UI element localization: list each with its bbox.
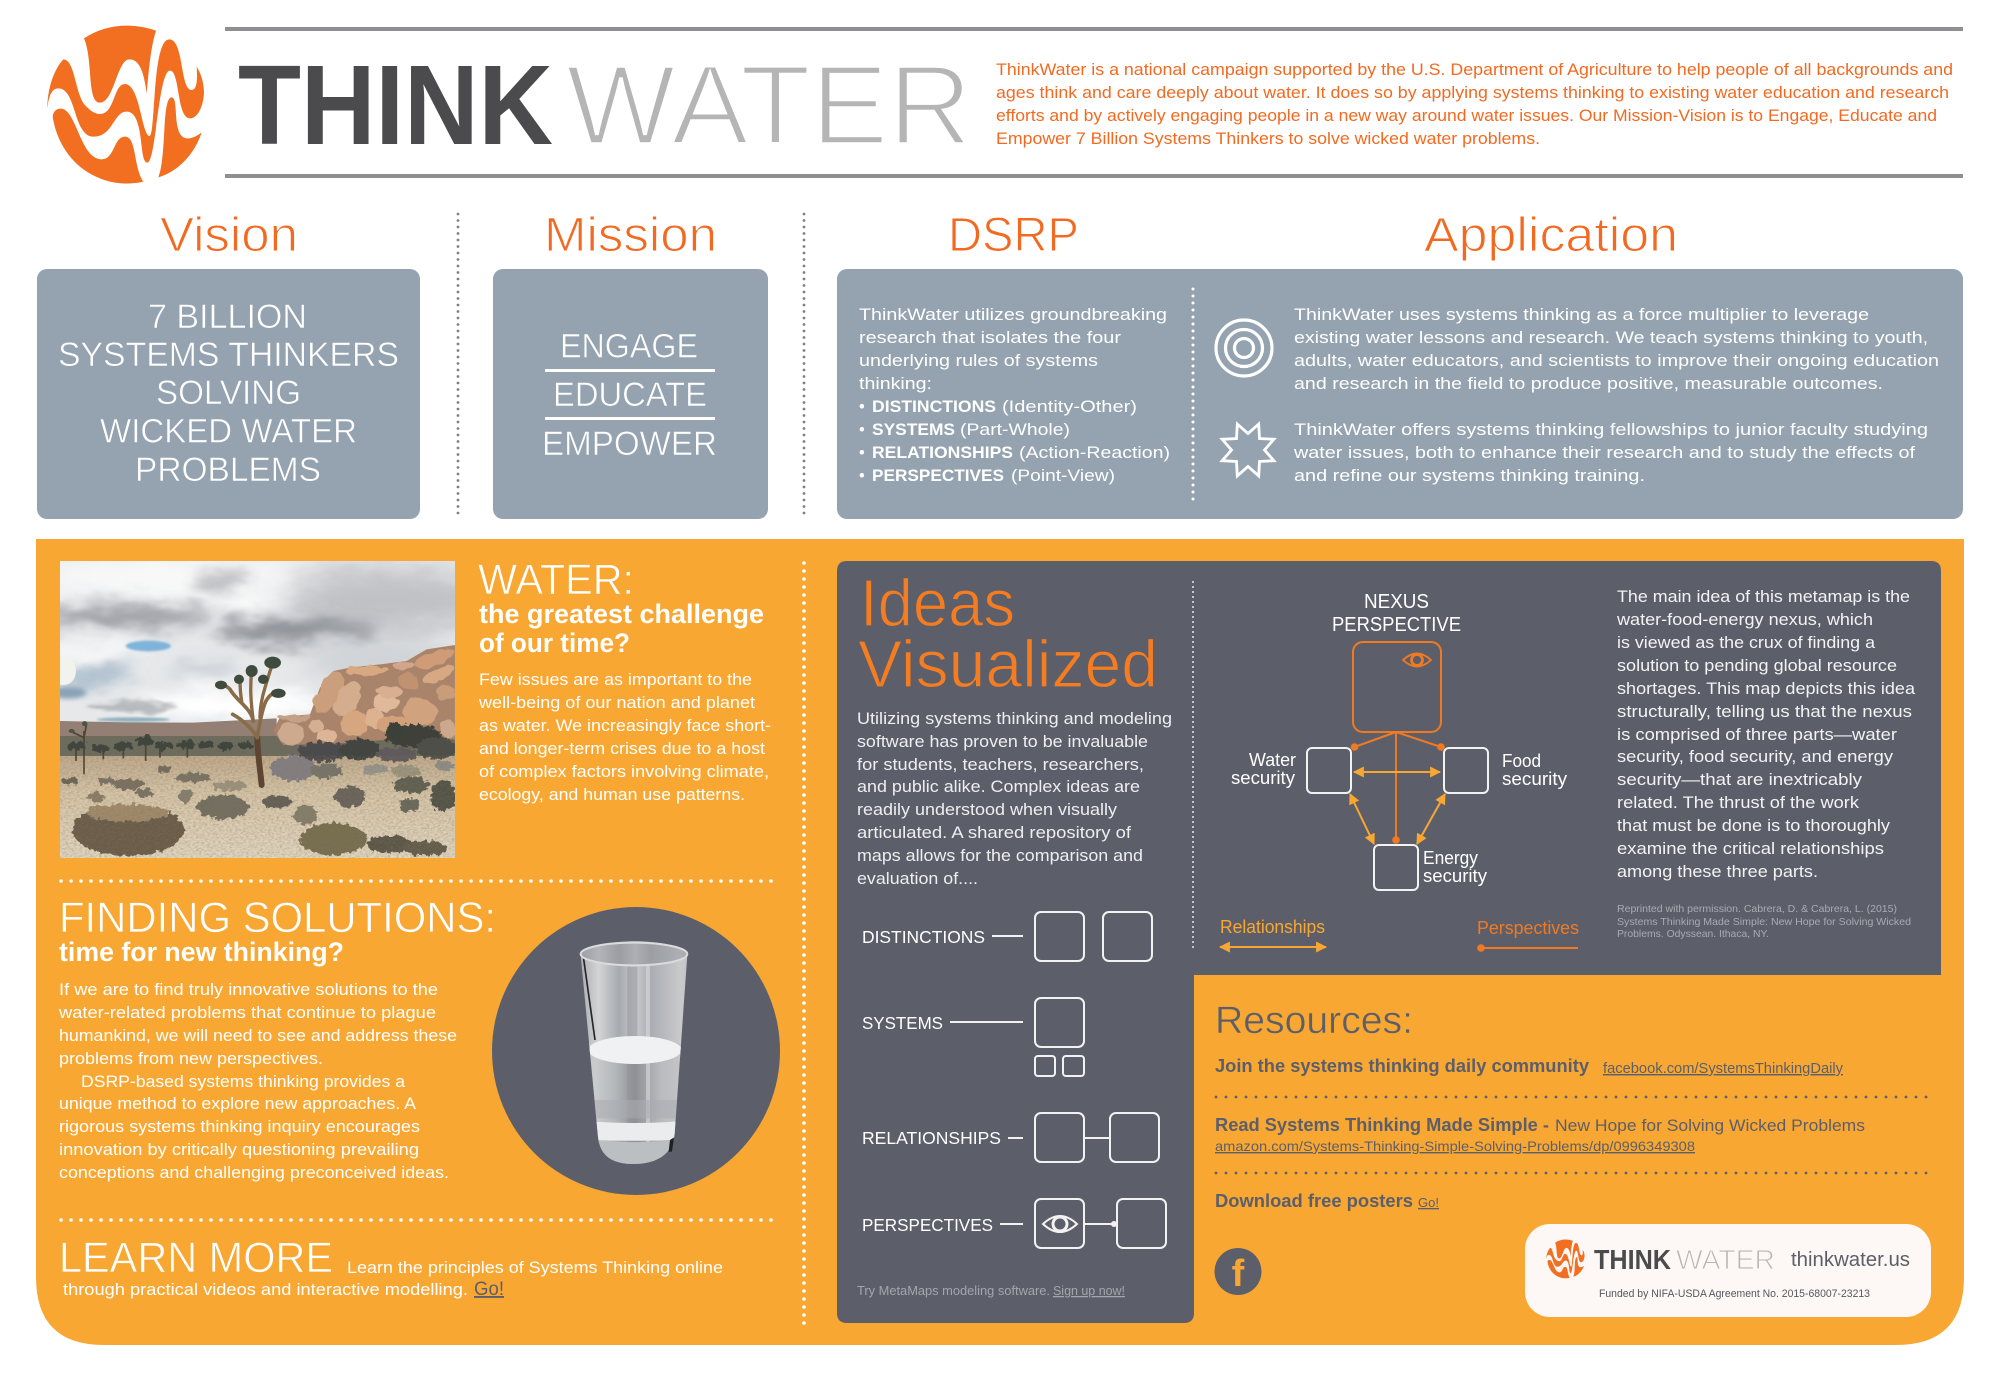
footer logo card: Funded by NIFA-USDA Agreement No. 2015-68007-23213 [1599,1288,1870,1300]
legend: relationships: Relationships [1220,916,1325,937]
part labels: security [1502,769,1567,789]
application text 1: and research in the field to produce positive, measurable outcomes. [1294,375,1883,393]
part boxes [1307,748,1488,890]
application text 1 [1294,306,1939,393]
text block: water: of complex factors involving climate, [479,763,769,781]
nexus diagram [1231,591,1567,890]
footer logo card: THINK [1594,1244,1671,1275]
icon: facebook [1214,1248,1262,1295]
joshua tree [225,668,273,788]
treeline [67,736,253,752]
citation: Problems. Odyssean. Ithaca, NY. [1617,928,1769,940]
relationship arrows [1350,772,1445,844]
icon: facebook: f [1232,1253,1245,1295]
resource: community [1215,1056,1844,1077]
DSRP text: underlying rules of systems [859,352,1098,370]
text block: metamap: is viewed as the crux of finding a [1617,634,1876,652]
diagram: perspectives [862,1199,1166,1248]
heading: ideas visualized [858,566,1158,702]
diagram: systems [862,998,1084,1076]
heading: finding solutions: FINDING SOLUTIONS: [59,894,496,942]
footer logo card: thinkwater.us [1791,1249,1910,1271]
title: THINK WATER [238,42,972,168]
application text 2: ThinkWater offers systems thinking fellowships to junior faculty studying [1294,421,1928,439]
text block: metamap: shortages. This map depicts this idea [1617,680,1916,698]
resource: book [1215,1115,1865,1154]
intro paragraph: ages think and care deeply about water. It does so by applying systems thinking to existing water education and research [996,84,1949,102]
citation: Systems Thinking Made Simple: New Hope for Solving Wicked [1617,916,1911,928]
panel: vision: PROBLEMS [135,451,321,489]
application text 1: ThinkWater uses systems thinking as a force multiplier to leverage [1294,306,1869,324]
application text 1: existing water lessons and research. We teach systems thinking to youth, [1294,329,1928,347]
DSRP text: PERSPECTIVES [872,467,1004,485]
icon: eye [1043,1216,1077,1232]
header rules [225,27,1963,178]
text block: metamap: security—that are inextricably [1617,771,1863,789]
heading: WATER: WATER: [478,556,634,604]
text block: water: and longer-term crises due to a host [479,740,765,758]
resources heading: Resources: [1215,1000,1413,1042]
diagram: perspectives: PERSPECTIVES [862,1215,993,1235]
DSRP text: (Identity-Other) [1002,398,1137,416]
text block: ideas: and public alike. Complex ideas are [857,778,1140,796]
panel: vision: 7 BILLION [148,298,307,336]
text block: metamap: water-food-energy nexus, which [1616,611,1873,629]
panel: vision: SYSTEMS THINKERS [58,336,399,374]
DSRP text: (Part-Whole) [960,421,1070,439]
diagram: relationships [862,1113,1159,1162]
text block: metamap: is comprised of three parts—water [1617,726,1898,744]
part labels: security [1423,866,1487,886]
text block: water: as water. We increasingly face short- [479,717,771,735]
resource: book: amazon.com/Systems-Thinking-Simple-Solving-Problems/dp/0996349308 [1215,1138,1695,1154]
heading: WATER [478,556,764,658]
logo: orange water circle [47,26,204,184]
text block: water: well-being of our nation and planet [478,694,755,712]
panel: vision: WICKED WATER [100,412,357,450]
DSRP text: DISTINCTIONS [872,398,996,416]
DSRP text: • [859,398,865,416]
metamaps note: Sign up now! [1053,1284,1125,1298]
text block: ideas: readily understood when visually [857,801,1118,819]
application text 2 [1293,421,1928,485]
learn more: LEARN MORE [59,1234,333,1282]
heading: finding solutions [59,894,496,967]
text block: finding solutions: If we are to find truly innovative solutions to the [59,981,438,999]
application text 2: water issues, both to enhance their research and to study the effects of [1293,444,1915,462]
heading: ideas visualized: Visualized [858,627,1158,702]
section headings: Mission [544,209,717,262]
inner dotted divider [1192,582,1194,952]
text block: finding solutions: problems from new perspectives. [59,1050,323,1068]
learn more: through practical videos and interactive modelling. [63,1281,468,1299]
citation [1617,903,1911,940]
part labels [1231,750,1567,886]
legend: perspectives: Perspectives [1477,917,1579,938]
text block: metamap: that must be done is to thoroughly [1617,817,1891,835]
glass in circle [492,907,780,1195]
icon: target [1216,320,1272,376]
text block: finding solutions: innovation by critically questioning prevailing [59,1141,419,1159]
white dotted dividers [61,563,804,1326]
section headings: DSRP [948,209,1079,262]
icon: star [1222,424,1274,476]
text block: ideas: maps allows for the comparison and [857,847,1143,865]
section headings: Vision [160,209,298,262]
DSRP text: • [859,467,865,485]
nexus title: PERSPECTIVE [1332,614,1461,636]
text block: water: Few issues are as important to the [479,671,752,689]
intro paragraph: Empower 7 Billion Systems Thinkers to solve wicked water problems. [996,130,1540,148]
text block: ideas: evaluation of.... [857,870,978,888]
intro paragraph [996,61,1953,148]
text block: metamap: examine the critical relationships [1617,840,1884,858]
shrubs [61,722,457,856]
resource: book: Read Systems Thinking Made Simple - [1215,1115,1549,1135]
diagram: relationships: RELATIONSHIPS [862,1128,1001,1148]
heading: ideas visualized: Ideas [860,566,1015,641]
text block: metamap [1616,588,1916,881]
DSRP text: SYSTEMS [872,421,955,439]
intro paragraph: efforts and by actively engaging people in a new way around water issues. Our Mission-Vision is to Engage, Educate and [996,107,1937,125]
text block: ideas: software has proven to be invaluable [857,733,1148,751]
part labels: Water [1249,750,1296,770]
legend: relationships [1220,916,1326,947]
section headings [160,209,1678,262]
text block: finding solutions: humankind, we will need to see and address these [59,1027,457,1045]
heading: WATER: the greatest challenge [479,599,764,629]
text block: finding solutions: rigorous systems thinking inquiry encourages [59,1118,420,1136]
text block: metamap: related. The thrust of the work [1617,794,1860,812]
footer logo card: WATER [1676,1244,1775,1275]
text block: finding solutions: conceptions and challenging preconceived ideas. [59,1164,449,1182]
panel: mission: ENGAGE [560,328,698,366]
application text 1: adults, water educators, and scientists to improve their ongoing education [1294,352,1939,370]
title: THINK WATER: THINK [238,42,553,168]
text block: finding solutions: DSRP-based systems thinking provides a [81,1073,406,1091]
DSRP text: • [859,444,865,462]
heading: WATER: of our time? [479,628,630,658]
panel: vision [37,269,420,519]
DSRP text [859,306,1170,485]
diagram: systems: SYSTEMS [862,1013,943,1033]
DSRP text: thinking: [859,375,932,393]
text block: ideas: for students, teachers, researchers, [857,756,1144,774]
text block: water: ecology, and human use patterns. [479,786,745,804]
text block: metamap: The main idea of this metamap is the [1617,588,1910,606]
text block: finding solutions: water-related problems that continue to plague [58,1004,436,1022]
text block: metamap: solution to pending global resource [1617,657,1897,675]
text block: ideas: articulated. A shared repository of [857,824,1131,842]
DSRP text: research that isolates the four [859,329,1122,347]
perspective links [1351,732,1445,844]
citation: Reprinted with permission. Cabrera, D. & Cabrera, L. (2015) [1617,903,1897,915]
panel: DSRP and application [837,269,1963,519]
resource: book: New Hope for Solving Wicked Problems [1555,1116,1865,1135]
text block: finding solutions [58,981,457,1182]
small logo [1546,1240,1585,1278]
text block: ideas: Utilizing systems thinking and modeling [857,710,1172,728]
DSRP text: (Point-View) [1011,467,1115,485]
panel: mission [493,269,768,519]
diagram: distinctions [862,912,1152,961]
DSRP text: • [859,421,865,439]
nexus title: NEXUS [1364,591,1429,613]
nexus perspective box [1353,642,1441,732]
panel: mission: EDUCATE [553,376,707,414]
resource: posters: Download free posters [1215,1191,1413,1211]
section headings: Application [1424,209,1678,262]
part labels: Energy [1423,848,1478,868]
panel: orange background [36,539,1964,1345]
resource: community: Join the systems thinking daily community [1215,1056,1589,1076]
resource: posters: Go! [1418,1195,1439,1210]
text block: metamap: structurally, telling us that the nexus [1617,703,1912,721]
DSRP text: RELATIONSHIPS [872,444,1013,462]
panel: vision: SOLVING [156,374,301,412]
text block: water [478,671,771,804]
text block: metamap: security, food security, and energy [1617,748,1894,766]
DSRP text: ThinkWater utilizes groundbreaking [859,306,1167,324]
panel: mission: EMPOWER [542,425,717,463]
part labels: Food [1502,751,1541,771]
rocks [273,645,455,745]
icon: glass of water [580,941,688,1164]
column dividers [458,214,804,518]
resource: community: facebook.com/SystemsThinkingDaily [1603,1061,1844,1077]
learn more: Go! [474,1279,504,1300]
panel: ideas visualized background [837,561,1941,1323]
text block: finding solutions: unique method to explore new approaches. A [59,1095,416,1113]
DSRP text: (Action-Reaction) [1019,444,1170,462]
part labels: security [1231,768,1295,788]
text block: ideas [857,710,1172,888]
text block: metamap: among these three parts. [1617,863,1818,881]
nexus title [1332,591,1461,636]
learn more: Learn the principles of Systems Thinking online [347,1259,723,1277]
legend: perspectives [1477,917,1579,952]
intro paragraph: ThinkWater is a national campaign supported by the U.S. Department of Agriculture to help people of all backgrounds and [996,61,1953,79]
metamaps note: Try MetaMaps modeling software. [857,1284,1050,1298]
diagram: distinctions: DISTINCTIONS [862,927,985,947]
learn more [59,1234,723,1300]
title: THINK WATER: WATER [566,42,972,168]
resource dividers [1216,1097,1930,1173]
photo: desert landscape [60,561,455,858]
heading: finding solutions: time for new thinking? [59,937,344,967]
application text 2: and refine our systems thinking training. [1294,467,1645,485]
footer logo card [1525,1224,1931,1317]
